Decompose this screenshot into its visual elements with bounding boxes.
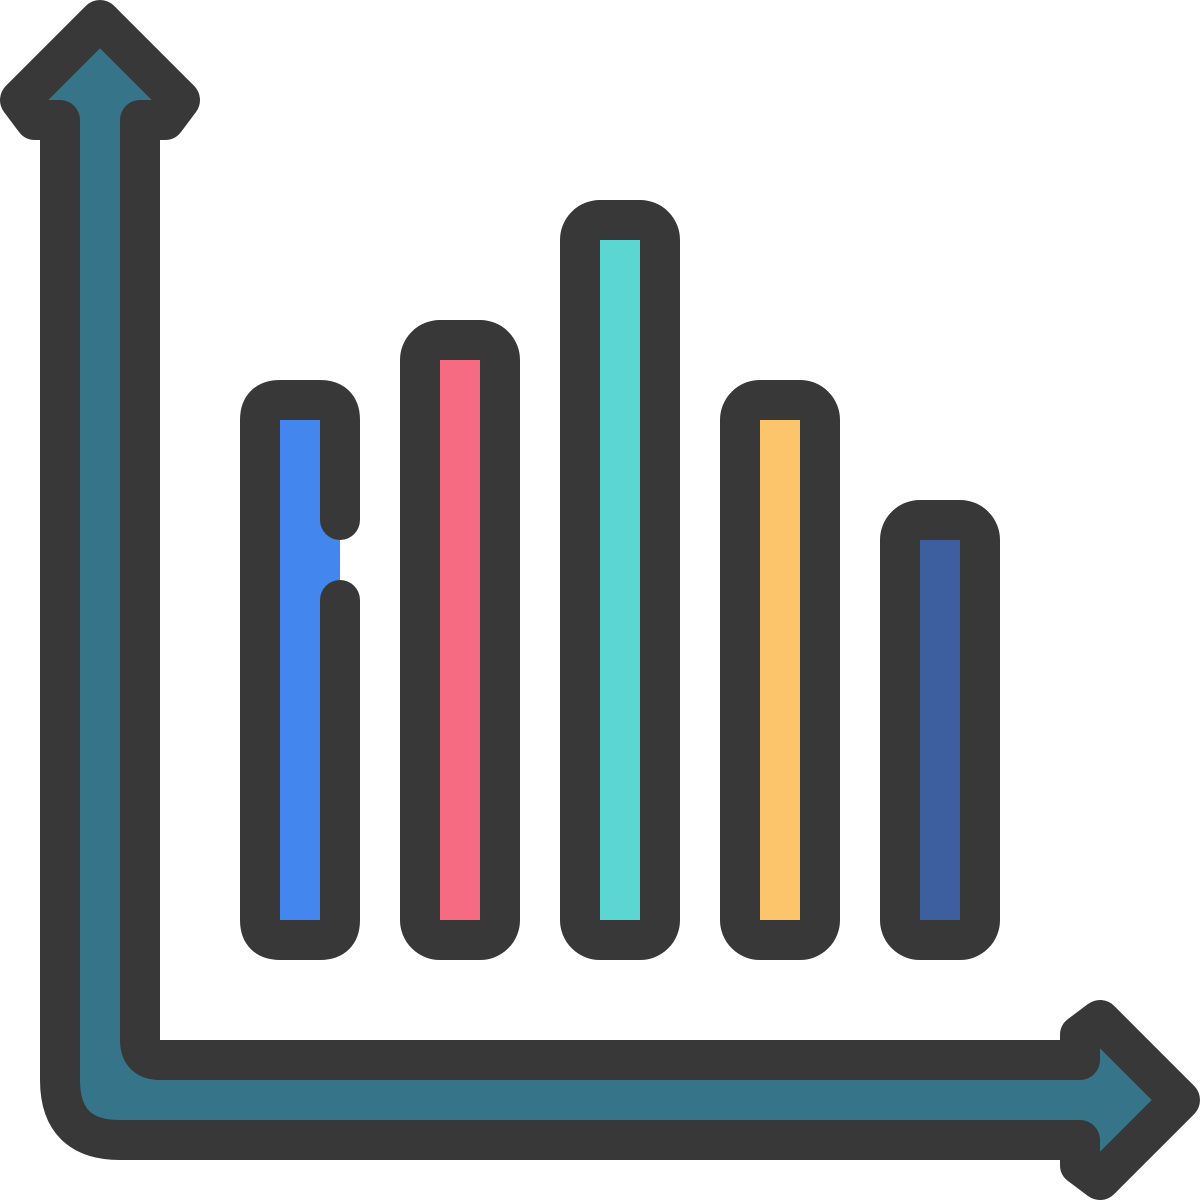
bar: dark blue bbox=[900, 520, 980, 940]
bar: pink bbox=[420, 340, 500, 940]
bar: turquoise bbox=[580, 220, 660, 940]
bar: yellow bbox=[740, 400, 820, 940]
bar: blue bbox=[260, 400, 340, 940]
